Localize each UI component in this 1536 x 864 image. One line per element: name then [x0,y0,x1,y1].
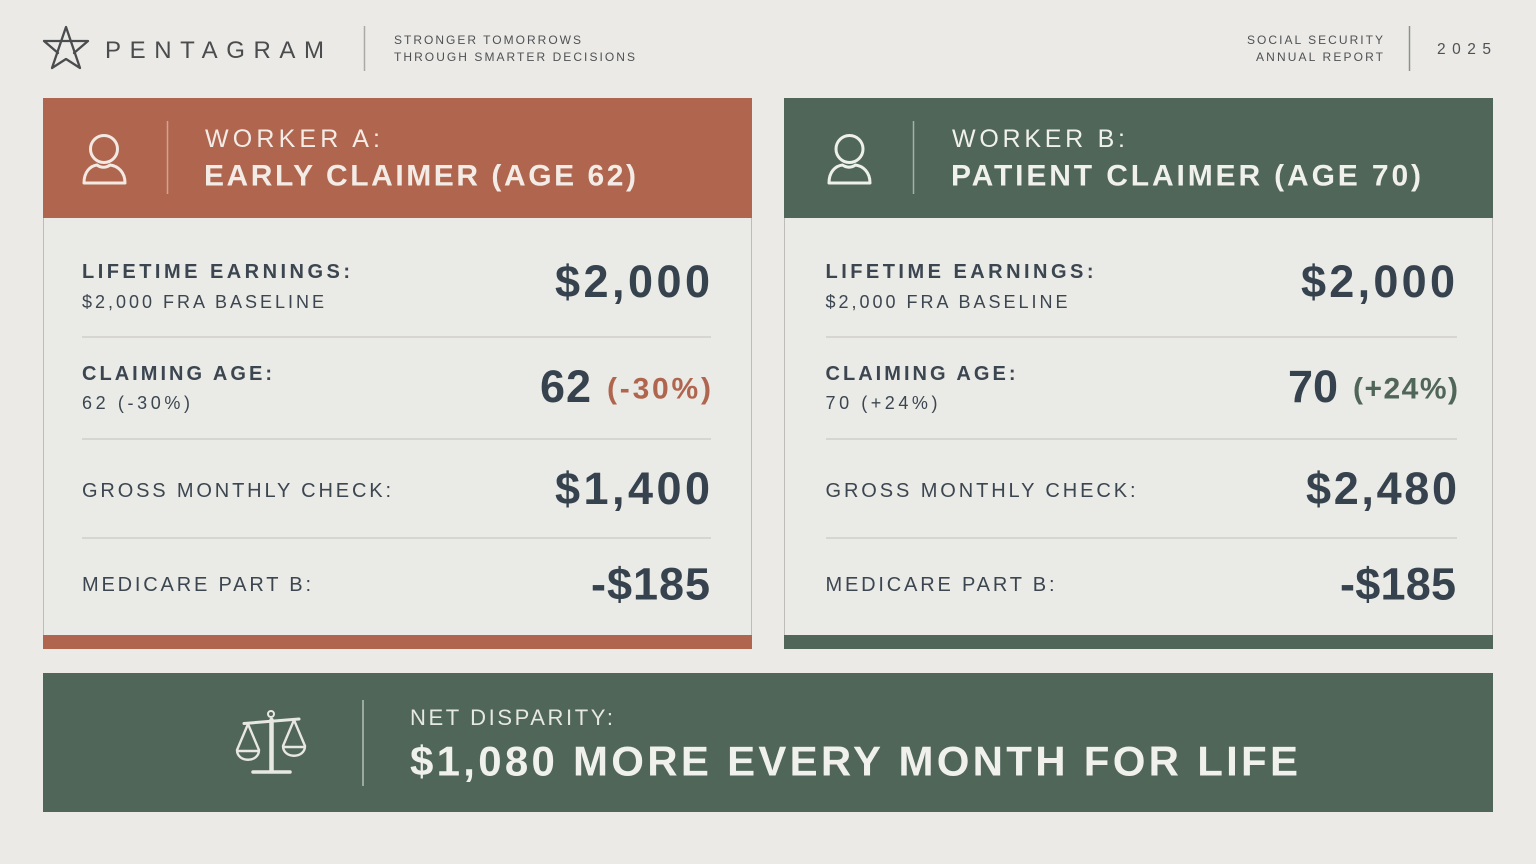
banner headline: $1,080 MORE EVERY MONTH FOR LIFE [410,738,1298,784]
row: claiming age [82,361,711,413]
row: claiming age: CLAIMING AGE: [826,363,1016,385]
row: claiming age: (+24%) [1353,372,1458,406]
row: lifetime earnings [82,256,710,312]
heading: worker A: WORKER A: [205,125,380,153]
icon: person [829,136,870,183]
heading: worker A [204,125,636,192]
row: medicare part b: MEDICARE PART B: [82,574,311,596]
row: claiming age: 70 [1288,361,1338,412]
accent bar [784,635,1493,649]
icon: pentagram star logo [44,27,88,68]
year: 2025 [1437,41,1491,58]
tagline: STRONGER TOMORROWS [394,33,581,47]
row: lifetime earnings: $2,000 [1301,256,1455,307]
row: gross monthly check: GROSS MONTHLY CHECK: [826,480,1136,502]
row: medicare part b: -$185 [591,558,710,610]
row: gross monthly check [82,463,710,514]
panel: worker B [784,98,1493,649]
tagline [394,33,635,64]
row: claiming age: 70 (+24%) [826,393,938,413]
panel header: worker B [784,98,1493,218]
row: lifetime earnings: $2,000 FRA BASELINE [82,292,324,312]
report title [1247,33,1384,64]
row: gross monthly check: $2,480 [1306,463,1457,514]
logo wordmark: PENTAGRAM [105,37,324,64]
heading: worker B: PATIENT CLAIMER (AGE 70) [951,160,1421,192]
row: claiming age: CLAIMING AGE: [82,363,272,385]
row: medicare part b [826,558,1456,610]
row: claiming age: 62 [540,361,591,412]
banner: net disparity [43,673,1493,812]
banner label: NET DISPARITY: [410,705,613,730]
row: lifetime earnings: $2,000 [555,256,710,307]
row: lifetime earnings: LIFETIME EARNINGS: [826,261,1094,283]
heading: worker B [951,125,1421,192]
report title: SOCIAL SECURITY [1247,33,1383,47]
row: lifetime earnings: LIFETIME EARNINGS: [82,261,350,283]
icon: balance scale [237,711,305,772]
row: medicare part b [82,558,710,610]
row: gross monthly check: $1,400 [555,463,710,514]
report title: ANNUAL REPORT [1256,50,1384,64]
row: claiming age: 62 (-30%) [82,393,190,413]
row: medicare part b: MEDICARE PART B: [826,574,1054,596]
row: lifetime earnings [826,256,1455,312]
heading: worker B: WORKER B: [952,125,1125,153]
heading: worker A: EARLY CLAIMER (AGE 62) [204,160,636,192]
panel: worker A [43,98,752,649]
accent bar [43,635,752,649]
row: claiming age [826,361,1458,413]
tagline: THROUGH SMARTER DECISIONS [394,50,635,64]
row: gross monthly check: GROSS MONTHLY CHECK: [82,480,391,502]
row: gross monthly check [826,463,1457,514]
row: lifetime earnings: $2,000 FRA BASELINE [826,292,1068,312]
row: medicare part b: -$185 [1340,558,1456,610]
panel header: worker A [43,98,752,218]
header [44,26,1491,71]
row: claiming age: (-30%) [607,372,711,406]
icon: person [84,136,125,183]
